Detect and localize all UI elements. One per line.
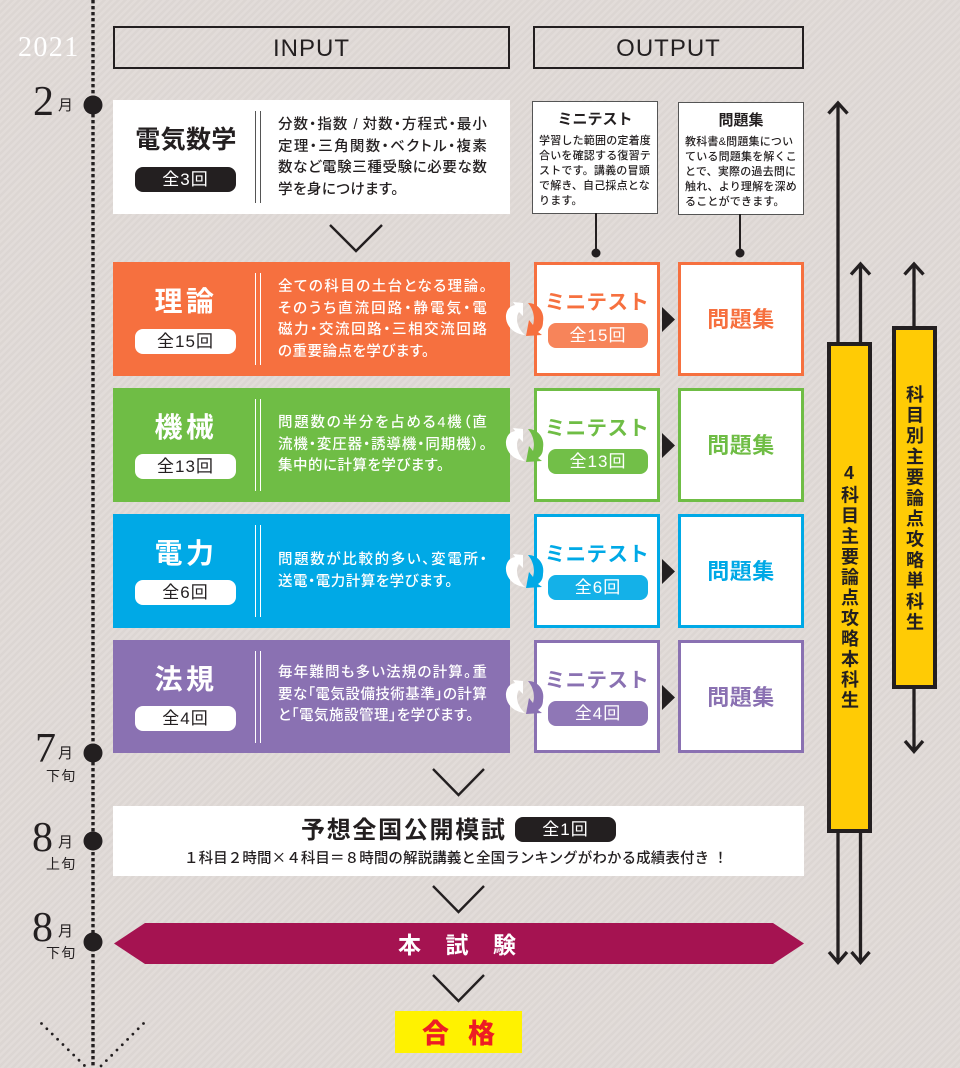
mini test label: ミニテスト (545, 417, 649, 440)
icon: repeat cycle power (506, 554, 544, 588)
session count pill: 全3回 (162, 170, 209, 189)
date: late August: 下旬 (46, 945, 76, 961)
panel: workbook theory (678, 262, 804, 376)
subject name: 電気数学 (135, 126, 237, 154)
heading: INPUT (113, 26, 510, 69)
bar: single-subject course (892, 326, 937, 689)
heading: INPUT: INPUT (273, 35, 350, 62)
date: early August: 8 (32, 815, 53, 861)
description: 集中的に計算を学びます。 (278, 458, 445, 474)
panel: electric power (113, 514, 510, 628)
date: late August: 8 (32, 905, 53, 951)
description (278, 116, 487, 198)
mock exam description: １科目２時間×４科目＝８時間の解説講義と全国ランキングがわかる成績表付き ！ (184, 847, 728, 868)
panel: mini test power (534, 514, 660, 628)
session count pill (548, 575, 648, 600)
panel: workbook machinery (678, 388, 804, 502)
description: 要な「電気設備技術基準」の計算 (278, 687, 487, 703)
icon: repeat cycle regulations (506, 680, 544, 714)
session count pill (135, 580, 236, 605)
panel: theory (113, 262, 510, 376)
description: 問題数が比較的多い、変電所・ (278, 552, 487, 568)
session count pill: 全15回 (570, 326, 626, 345)
panel: workbook regulations: 問題集 (707, 685, 775, 710)
description (278, 664, 487, 724)
session count pill (515, 817, 616, 842)
panel: workbook regulations (678, 640, 804, 753)
date: late July: 7 (35, 726, 56, 772)
session count pill: 全4回 (575, 704, 621, 723)
description: 磁力・交流回路・三相交流回路 (278, 322, 487, 338)
session count pill: 全13回 (157, 457, 214, 476)
mini test label: ミニテスト (545, 543, 649, 566)
date: late July: 下旬 (46, 768, 76, 784)
callout: mini test: ミニテスト (557, 111, 632, 128)
subject name: 法規 (154, 664, 218, 695)
date: February (33, 79, 73, 125)
session count pill: 全6回 (575, 578, 621, 597)
panel: mini test theory (534, 262, 660, 376)
icon: repeat cycle machinery (506, 428, 544, 462)
session count pill: 全15回 (157, 332, 214, 351)
subject name: 機械 (154, 412, 218, 443)
callout: mini test (532, 101, 658, 214)
arrow: chevron to mock exam (432, 768, 485, 797)
description: と「電気施設管理」を学びます。 (278, 708, 474, 724)
callout: mini test: で解き、自己採点とな (539, 180, 650, 192)
heading: OUTPUT (533, 26, 804, 69)
callout: workbook: ることができます。 (685, 196, 785, 208)
description (278, 551, 487, 590)
callout: mini test: ります。 (539, 195, 583, 207)
description: 学を身につけます。 (278, 182, 399, 198)
date: late July (35, 726, 76, 784)
description (278, 278, 487, 360)
date: late August: 月 (58, 923, 73, 940)
panel: regulations (113, 640, 510, 753)
arrows: mini test to workbook (662, 307, 675, 710)
arrow: chevron down (329, 224, 383, 253)
panel: workbook power (678, 514, 804, 628)
session count pill (135, 454, 236, 479)
description: 数など電験三種受験に必要な数 (278, 160, 487, 176)
panel: workbook machinery: 問題集 (707, 433, 775, 458)
description: 流機・変圧器・誘導機・同期機）。 (278, 437, 487, 453)
banner: main exam: 本試験 (398, 932, 540, 958)
description: の重要論点を学びます。 (278, 344, 430, 360)
date: late August (32, 905, 76, 961)
subject name: 電力 (154, 538, 218, 569)
session count pill (135, 329, 236, 354)
session count pill (135, 706, 236, 731)
callout: mini test: 学習した範囲の定着度 (539, 135, 651, 147)
date: late July: 月 (58, 745, 73, 762)
session count pill (548, 701, 648, 726)
banner: main exam (114, 923, 804, 964)
date: February: 月 (58, 97, 73, 114)
description: 問題数の半分を占める4機（直 (278, 415, 487, 431)
vertical course name: 科目別主要論点攻略単科生 (904, 385, 924, 633)
panel: mock exam (113, 806, 804, 876)
vertical course name: 4科目主要論点攻略本科生 (839, 463, 859, 711)
panel: machinery (113, 388, 510, 502)
panel: workbook theory: 問題集 (707, 307, 775, 332)
result: pass: 合格 (422, 1019, 514, 1049)
icon: repeat cycle theory (506, 302, 544, 336)
panel: mini test machinery (534, 388, 660, 502)
session count pill (548, 449, 648, 474)
result: pass (395, 1011, 522, 1053)
description: そのうち直流回路・静電気・電 (278, 301, 487, 317)
panel: mini test regulations (534, 640, 660, 753)
date: early August: 月 (58, 834, 73, 851)
description: 毎年難問も多い法規の計算。重 (278, 665, 487, 681)
callout: workbook: ている問題集を解くこ (685, 151, 797, 163)
description: 定理・三角関数・ベクトル・複素 (278, 139, 487, 155)
description: 送電・電力計算を学びます。 (278, 574, 453, 590)
subject name: 理論 (154, 286, 218, 317)
callout: workbook: 問題集 (718, 112, 764, 129)
callout: workbook (678, 102, 804, 215)
session count pill (135, 167, 236, 192)
callout: mini test: 合いを確認する復習テ (539, 150, 651, 162)
panel: electrical math (113, 100, 510, 214)
date: early August: 上旬 (46, 856, 76, 872)
session count pill: 全6回 (162, 583, 209, 602)
session count pill: 全13回 (570, 452, 626, 471)
session count pill (548, 323, 648, 348)
connectors from callouts (592, 213, 744, 258)
callout: workbook: とで、実際の過去問に (685, 166, 796, 178)
date: early August (32, 815, 76, 872)
mini test label: ミニテスト (545, 669, 649, 692)
callout: workbook: 教科書&問題集につい (685, 136, 793, 148)
year label: 2021 (18, 32, 80, 63)
heading: OUTPUT: OUTPUT (616, 35, 721, 62)
mini test label: ミニテスト (545, 291, 649, 314)
date: February: 2 (33, 79, 54, 125)
session count pill: 全4回 (162, 709, 209, 728)
description (278, 414, 487, 474)
description: 分数・指数 / 対数・方程式・最小 (278, 117, 487, 133)
mock exam title: 予想全国公開模試 (301, 817, 507, 844)
callout: workbook: 触れ、より理解を深め (685, 181, 797, 193)
bar: 4-subject main course (827, 342, 872, 833)
description: 全ての科目の土台となる理論。 (278, 279, 487, 295)
session count pill: 全1回 (542, 820, 589, 839)
panel: workbook power: 問題集 (707, 559, 775, 584)
callout: mini test: ストです。講義の冒頭 (539, 165, 650, 177)
